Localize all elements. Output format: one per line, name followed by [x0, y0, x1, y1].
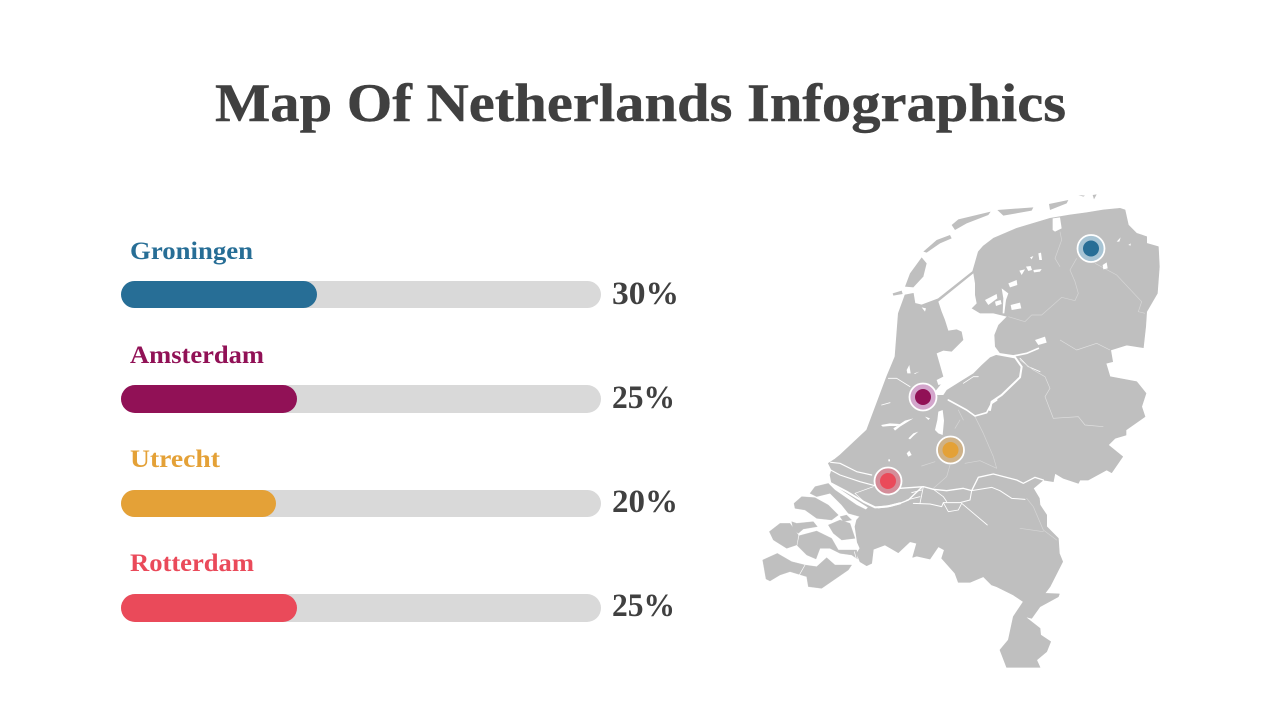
- bar track: Rotterdam: [121, 594, 601, 622]
- Zeeland islands: [763, 483, 868, 588]
- small waters: Noord-Holland and Flevoland: [907, 307, 948, 385]
- province borders, central: [922, 410, 1057, 540]
- bar fill: Amsterdam: [121, 385, 297, 413]
- marker: Utrecht: [937, 436, 964, 464]
- waterways: Randmeer and Noord-Holland canals: [882, 348, 1040, 410]
- bar track: Utrecht: [121, 490, 601, 517]
- map of the Netherlands: [763, 194, 1159, 667]
- IJssel and Overijssel borders: [1020, 340, 1110, 427]
- lakes, north: [985, 217, 1131, 313]
- value: Groningen: 30%: [612, 276, 679, 312]
- row: Utrecht: [121, 446, 678, 520]
- Wadden islands: [893, 194, 1097, 296]
- bar fill: Rotterdam: [121, 594, 297, 622]
- bar fill: Groningen: [121, 281, 317, 308]
- Twente lake: [1035, 337, 1047, 345]
- province borders, north: [1008, 232, 1145, 322]
- panel: city progress bars: [121, 238, 679, 624]
- bar track: Amsterdam: [121, 385, 601, 413]
- delta rivers: [798, 462, 900, 577]
- bar track: Groningen: [121, 281, 601, 308]
- IJsselmeer: [882, 273, 1040, 410]
- row: Groningen: [121, 238, 679, 312]
- small waters, central: [881, 410, 944, 461]
- central rivers and borders: [878, 400, 1057, 540]
- rivers, central: [878, 400, 1043, 525]
- title: Map Of Netherlands Infographics: [215, 73, 1066, 133]
- marker: Rotterdam: [874, 468, 902, 494]
- label: Rotterdam: Rotterdam: [130, 550, 254, 577]
- label: Groningen: Groningen: [130, 238, 253, 265]
- mainland: [828, 208, 1159, 667]
- label: Amsterdam: Amsterdam: [130, 342, 264, 369]
- Friesland and Groningen details: [985, 217, 1145, 322]
- delta and Zeeland: [763, 462, 900, 588]
- value: Amsterdam: 25%: [612, 380, 675, 416]
- label: Utrecht: Utrecht: [130, 446, 221, 473]
- value: Rotterdam: 25%: [612, 588, 675, 624]
- bar fill: Utrecht: [121, 490, 276, 517]
- row: Rotterdam: [121, 550, 675, 624]
- value: Utrecht: 20%: [612, 484, 678, 520]
- marker: Amsterdam: [910, 384, 936, 410]
- row: Amsterdam: [121, 342, 675, 416]
- marker: Groningen: [1078, 235, 1104, 262]
